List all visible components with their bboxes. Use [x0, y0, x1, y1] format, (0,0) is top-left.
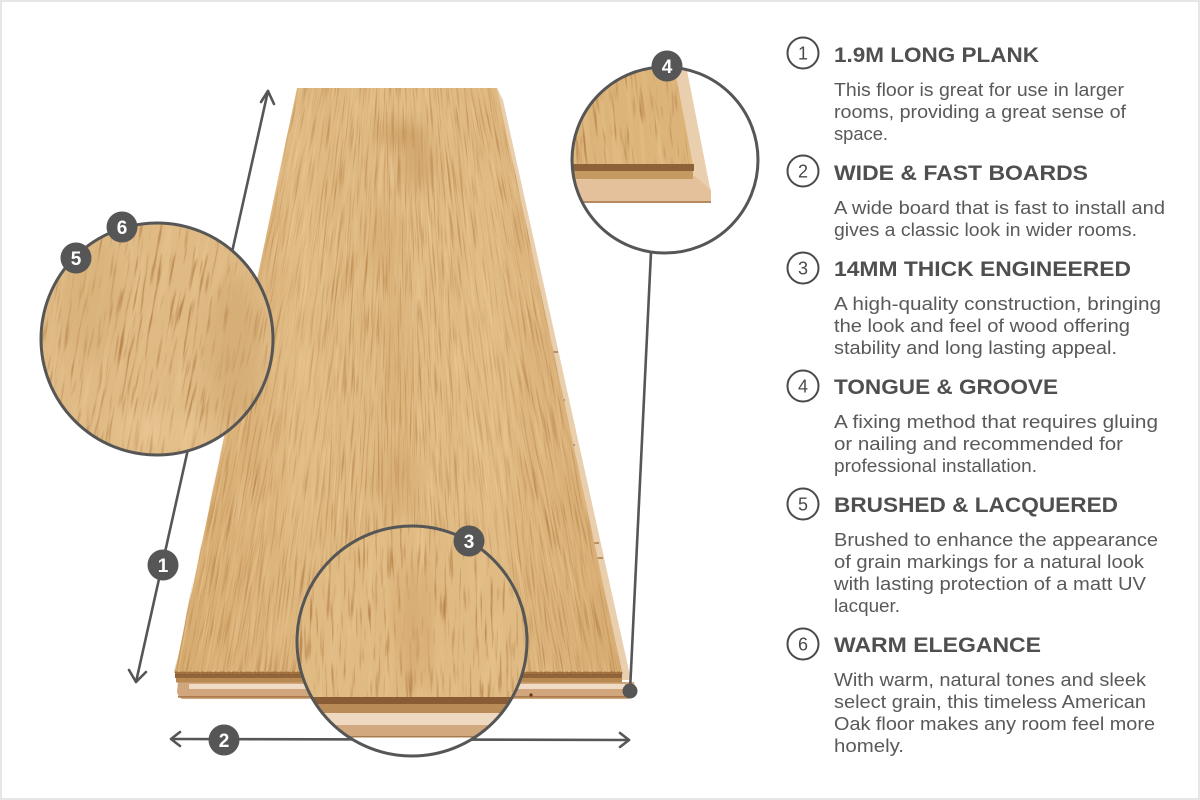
badge 1 — [148, 550, 178, 580]
badge 2: 2 — [219, 731, 229, 752]
badge 4: 4 — [662, 57, 673, 78]
feature 6: With warm, natural tones and sleek — [834, 670, 1147, 690]
feature 2: gives a classic look in wider rooms. — [834, 220, 1137, 240]
feature 4: or nailing and recommended for — [834, 434, 1123, 454]
feature 6: Oak floor makes any room feel more — [834, 714, 1155, 734]
feature 5: 5 — [798, 494, 808, 514]
feature 2: WIDE & FAST BOARDS — [834, 162, 1088, 185]
badge 3: 3 — [464, 532, 474, 553]
feature 6: WARM ELEGANCE — [834, 634, 1041, 657]
feature 3 — [788, 252, 1161, 358]
feature 3: the look and feel of wood offering — [834, 316, 1130, 336]
badge 5: 5 — [71, 249, 82, 270]
feature 4 — [788, 370, 1158, 476]
leader line to callout 4 — [622, 252, 651, 698]
feature 1 — [788, 38, 1127, 144]
badge 5 — [60, 242, 92, 274]
feature 1: This floor is great for use in larger — [834, 80, 1124, 100]
tongue strip on the right edge — [497, 88, 631, 680]
callout circle: tongue and groove detail 4 — [570, 66, 760, 254]
feature 6: select grain, this timeless American — [834, 692, 1146, 712]
feature 6: homely. — [834, 736, 904, 756]
feature 5: Brushed to enhance the appearance — [834, 530, 1158, 550]
badge 6 — [106, 212, 138, 242]
feature 1: 1.9M LONG PLANK — [834, 44, 1039, 67]
badge 6: 6 — [117, 218, 127, 239]
feature 5: lacquer. — [834, 596, 900, 616]
badge 2 — [208, 724, 240, 756]
plank top surface — [175, 88, 622, 672]
arrow: plank length — [129, 91, 274, 682]
feature 3: A high-quality construction, bringing — [834, 294, 1161, 314]
feature 1: 1 — [798, 44, 808, 64]
feature 5: BRUSHED & LACQUERED — [834, 494, 1118, 517]
feature 4: professional installation. — [834, 456, 1037, 476]
plank front edge — [175, 672, 622, 682]
feature 2 — [788, 156, 1165, 240]
feature 3: 14MM THICK ENGINEERED — [834, 258, 1131, 281]
feature 6 — [788, 628, 1155, 756]
callout circle: thickness detail 3 — [290, 520, 535, 758]
feature 4: A fixing method that requires gluing — [834, 412, 1158, 432]
badge 1: 1 — [158, 556, 169, 577]
feature 6: 6 — [798, 634, 808, 654]
plank photo — [174, 88, 635, 699]
callout circle: grain detail 5 and 6 — [40, 222, 274, 456]
feature 3: 3 — [798, 258, 808, 278]
feature 3: stability and long lasting appeal. — [834, 338, 1117, 358]
feature 5: of grain markings for a natural look — [834, 552, 1145, 572]
feature 2: A wide board that is fast to install and — [834, 198, 1165, 218]
number badges on the image — [60, 50, 682, 756]
badge 4 — [652, 50, 682, 82]
feature 5 — [788, 488, 1158, 616]
feature 1: space. — [834, 124, 888, 144]
feature 4: 4 — [798, 376, 808, 396]
cathedral figure and tonal patches — [276, 110, 514, 562]
feature 5: with lasting protection of a matt UV — [833, 574, 1146, 594]
feature 1: rooms, providing a great sense of — [834, 102, 1127, 122]
feature 2: 2 — [798, 162, 808, 182]
feature 4: TONGUE & GROOVE — [834, 376, 1058, 399]
lower board edge — [177, 682, 635, 699]
badge 3 — [454, 526, 484, 556]
arrow: plank width — [171, 732, 629, 747]
wood grain — [174, 88, 622, 672]
